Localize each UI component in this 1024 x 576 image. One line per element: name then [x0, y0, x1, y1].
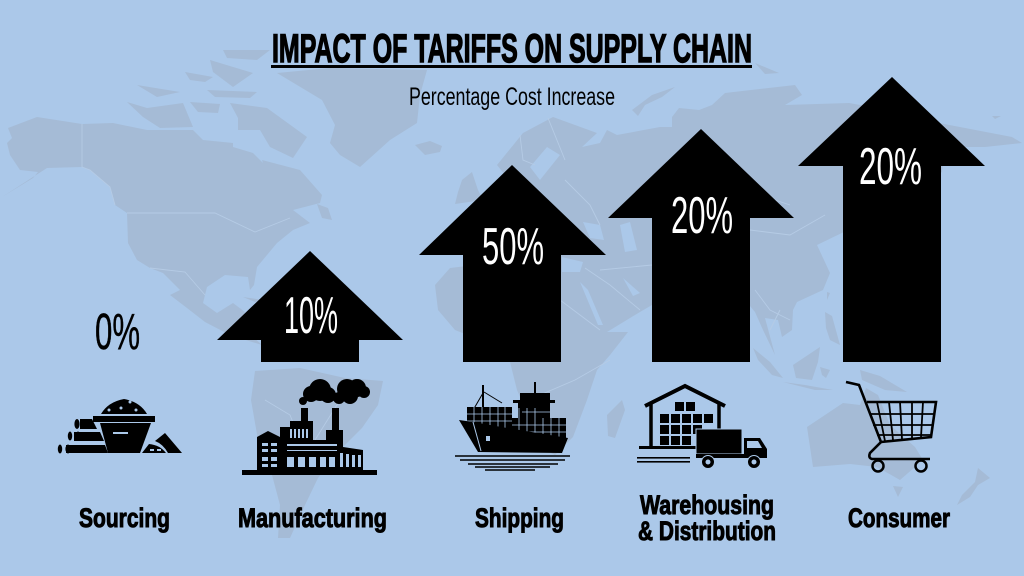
arrow: manufacturing 10%	[217, 251, 403, 362]
icon: warehouse and truck	[637, 386, 767, 468]
arrow: consumer 20%	[798, 77, 985, 362]
label: warehousing and distribution: Warehousing	[640, 490, 774, 520]
subtitle: Percentage Cost Increase	[409, 83, 615, 111]
label: warehousing and distribution: & Distribution	[638, 516, 776, 546]
arrow: manufacturing 10%: 10%	[284, 287, 338, 345]
icon: cargo ship	[455, 382, 570, 470]
title	[271, 27, 752, 71]
label: consumer: Consumer	[848, 503, 950, 533]
label: shipping: Shipping	[475, 503, 564, 533]
value: sourcing 0%: 0%	[95, 303, 140, 360]
arrow: consumer 20%: 20%	[859, 138, 922, 196]
icon: raw materials	[58, 399, 182, 454]
arrow: warehousing 20%	[608, 129, 794, 362]
arrow: warehousing 20%: 20%	[671, 187, 733, 245]
icon: factory	[242, 379, 377, 475]
arrow: shipping 50%	[419, 165, 606, 362]
icon: shopping cart	[846, 382, 936, 472]
label: sourcing: Sourcing	[79, 503, 170, 533]
arrow: shipping 50%: 50%	[482, 218, 544, 276]
title: IMPACT OF TARIFFS ON SUPPLY CHAIN	[272, 27, 752, 71]
label: warehousing and distribution	[638, 490, 776, 546]
label: manufacturing: Manufacturing	[238, 503, 387, 533]
